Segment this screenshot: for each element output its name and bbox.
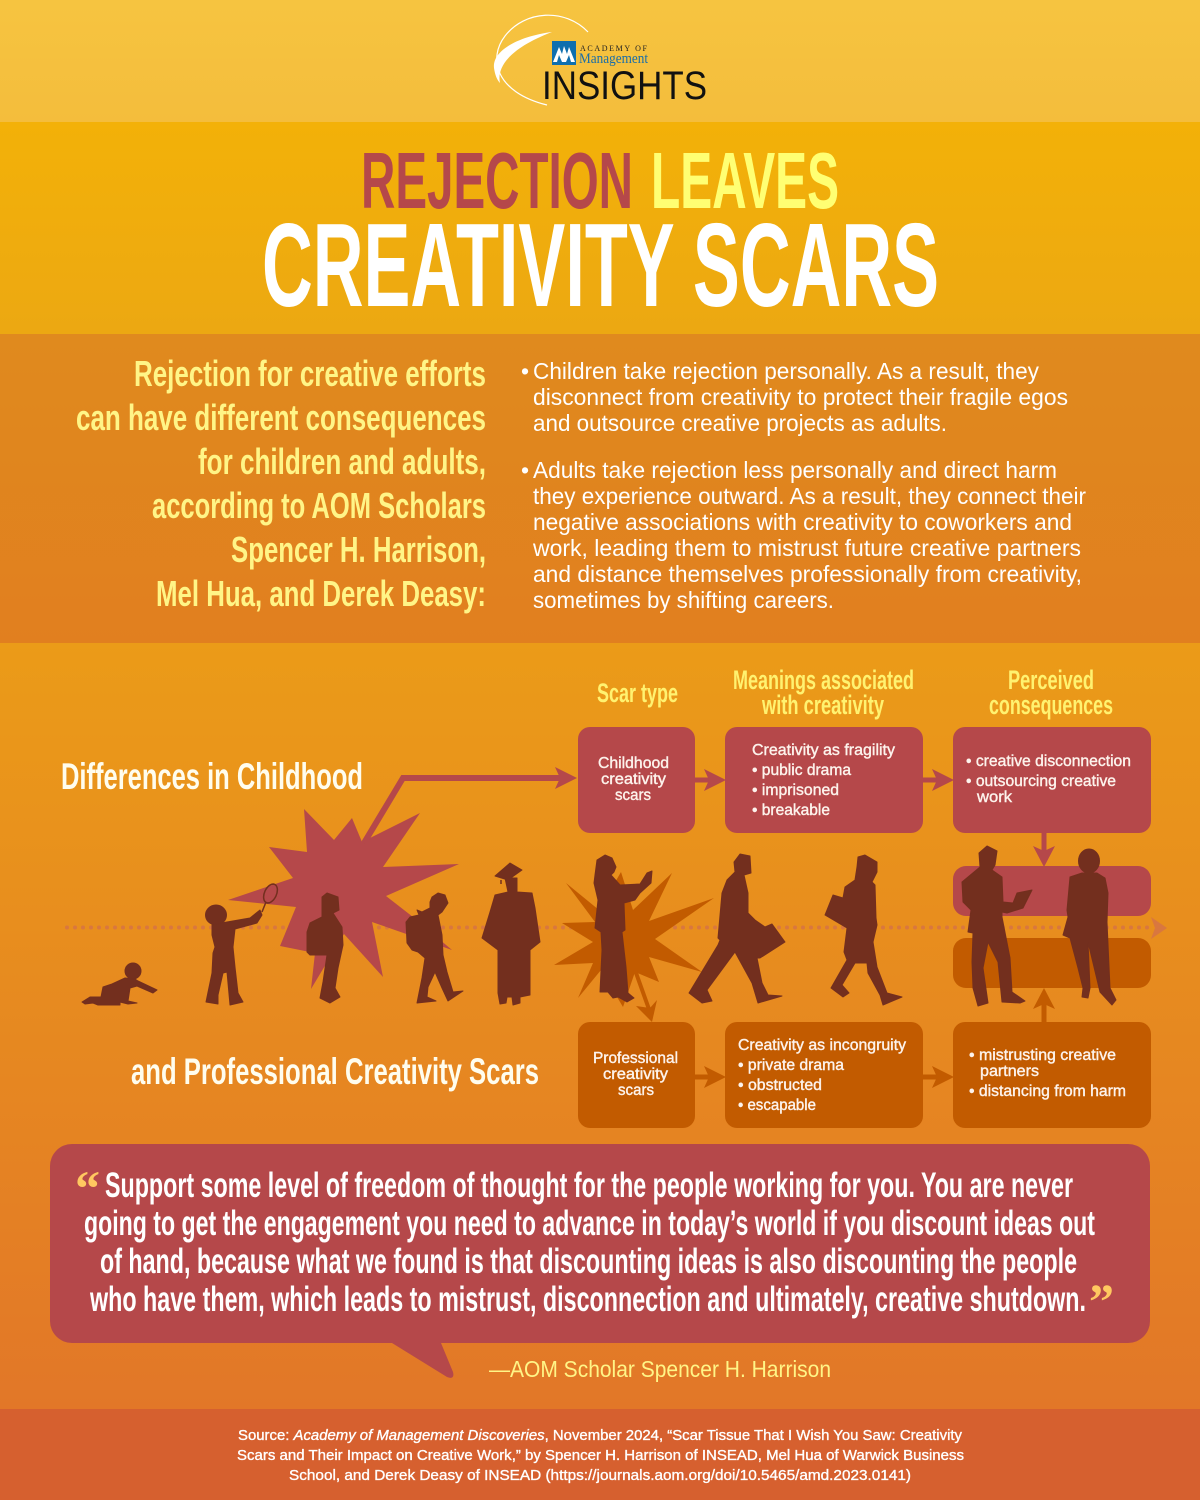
title xyxy=(262,136,939,332)
starburst: childhood xyxy=(228,809,459,989)
bullet: adults: Adults take rejection less personally and direct harm xyxy=(533,457,1057,483)
heading: perceived consequences: consequences xyxy=(989,690,1113,720)
band: childhood result xyxy=(953,866,1151,916)
icon: child with racquet xyxy=(206,882,280,1005)
panel: source footer xyxy=(0,1409,1200,1500)
icon: student with backpack xyxy=(307,893,343,1003)
logo: Academy of Management Insights: Management xyxy=(579,51,649,67)
panel: introduction xyxy=(0,334,1200,643)
heading: perceived consequences xyxy=(989,665,1113,720)
icon: student walking xyxy=(406,893,463,1003)
box: childhood consequences: • outsourcing creative xyxy=(966,773,1116,790)
box: professional creativity scars xyxy=(578,1022,695,1128)
lead text: according to AOM Scholars xyxy=(152,485,486,526)
bullet: children: disconnect from creativity to protect their fragile egos xyxy=(533,384,1068,410)
bullet: adults: • xyxy=(521,457,529,483)
bullet: children xyxy=(521,358,1068,436)
icon: opening quote mark: “ xyxy=(75,1160,100,1216)
bullet: adults: work, leading them to mistrust future creative partners xyxy=(532,535,1081,561)
icon: man with tablet xyxy=(962,846,1032,1006)
box: professional consequences: partners xyxy=(980,1063,1039,1080)
lead text: Rejection for creative efforts xyxy=(134,353,486,394)
box: creativity as fragility xyxy=(725,727,923,833)
lead text: for children and adults, xyxy=(198,441,486,482)
box: professional consequences xyxy=(953,1022,1151,1128)
logo: Academy of Management Insights: INSIGHTS xyxy=(542,64,707,108)
box: creativity as incongruity: • private drama xyxy=(738,1057,844,1074)
arrow: consequences up xyxy=(1033,988,1055,1022)
arrow: scars to meanings (professional) xyxy=(695,1066,726,1088)
lead text xyxy=(76,353,486,614)
box: professional consequences: • distancing from harm xyxy=(969,1083,1126,1100)
arrow: meanings to consequences (childhood) xyxy=(923,769,954,791)
source text xyxy=(237,1428,964,1484)
box: childhood consequences: work xyxy=(976,789,1013,806)
band: professional result xyxy=(953,938,1151,988)
box: childhood creativity scars: creativity xyxy=(601,771,666,788)
icon: woman with laptop xyxy=(594,855,652,1002)
arrow: burst to childhood scars xyxy=(364,767,577,843)
box: childhood consequences: • creative disconnection xyxy=(966,753,1131,770)
arrow: burst to professional scars xyxy=(635,970,657,1022)
box: creativity as fragility: • imprisoned xyxy=(752,782,839,799)
box: creativity as fragility: Creativity as fragility xyxy=(752,742,895,759)
box: creativity as incongruity: • obstructed xyxy=(738,1077,822,1094)
bullet: adults: they experience outward. As a result, they connect their xyxy=(533,483,1086,509)
panel: quote bubble xyxy=(50,1144,1150,1378)
icon: crawling baby xyxy=(82,963,157,1005)
icon: graduate xyxy=(482,863,540,1005)
icon: standing person xyxy=(1063,849,1116,1005)
logo: Academy of Management Insights: ACADEMY OF xyxy=(580,44,648,53)
heading: scar type: Scar type xyxy=(597,678,678,708)
lead text: can have different consequences xyxy=(76,397,486,438)
panel: logo band xyxy=(0,0,1200,122)
lead text: Spencer H. Harrison, xyxy=(231,529,486,570)
attribution: —AOM Scholar Spencer H. Harrison xyxy=(489,1356,831,1382)
box: creativity as incongruity xyxy=(725,1022,923,1128)
timeline dotted arrow xyxy=(67,917,1167,939)
bullet: children: • xyxy=(521,358,529,384)
heading: professional creativity scars: and Professional Creativity Scars xyxy=(131,1051,539,1092)
box: professional creativity scars: Professional xyxy=(593,1050,678,1067)
icon: man walking with briefcase xyxy=(689,854,785,1003)
box: creativity as fragility: • public drama xyxy=(752,762,851,779)
lead text: Mel Hua, and Derek Deasy: xyxy=(156,573,486,614)
panel: title band xyxy=(0,122,1200,334)
box: professional creativity scars: scars xyxy=(618,1082,654,1099)
bullet: adults xyxy=(521,457,1086,613)
icon: closing quote mark: ” xyxy=(1089,1273,1114,1329)
title: LEAVES xyxy=(651,136,839,225)
panel: diagram background xyxy=(0,643,1200,1409)
heading: meanings associated with creativity: with creativity xyxy=(761,690,884,720)
source text: School, and Derek Deasy of INSEAD (https://journals.aom.org/doi/10.5465/amd.2023.0141) xyxy=(289,1468,911,1484)
box: childhood creativity scars xyxy=(578,727,695,833)
quote text xyxy=(84,1166,1095,1319)
heading: meanings associated with creativity xyxy=(733,665,914,720)
box: childhood creativity scars: scars xyxy=(615,787,651,804)
arrow: consequences down xyxy=(1033,833,1055,867)
bullet: children: Children take rejection personally. As a result, they xyxy=(533,358,1039,384)
source text: Source: Academy of Management Discoveries , November 2024, “Scar Tissue That I Wish You Saw: Creativity xyxy=(238,1428,963,1444)
bullet: children: and outsource creative projects as adults. xyxy=(533,410,947,436)
starburst: professional xyxy=(554,872,714,1007)
box: childhood consequences xyxy=(953,727,1151,833)
box: creativity as incongruity: • escapable xyxy=(738,1097,816,1114)
arrow: scars to meanings (childhood) xyxy=(695,769,726,791)
heading: meanings associated with creativity: Meanings associated xyxy=(733,665,914,695)
heading: differences in childhood: Differences in Childhood xyxy=(61,756,363,797)
box: professional consequences: • mistrusting creative xyxy=(969,1047,1116,1064)
bullet: adults: negative associations with creativity to coworkers and xyxy=(533,509,1072,535)
box: creativity as incongruity: Creativity as incongruity xyxy=(738,1037,906,1054)
box: creativity as fragility: • breakable xyxy=(752,802,830,819)
arrow: meanings to consequences (professional) xyxy=(923,1066,954,1088)
logo: Academy of Management Insights xyxy=(494,15,707,108)
source text: Scars and Their Impact on Creative Work,” by Spencer H. Harrison of INSEAD, Mel Hua of Warwick Business xyxy=(237,1448,964,1464)
bullet: adults: sometimes by shifting careers. xyxy=(533,587,834,613)
box: childhood creativity scars: Childhood xyxy=(598,755,669,772)
title: REJECTION xyxy=(361,136,633,225)
heading: perceived consequences: Perceived xyxy=(1008,665,1094,695)
box: professional creativity scars: creativity xyxy=(603,1066,668,1083)
icon: woman walking xyxy=(825,855,902,1005)
bullet: adults: and distance themselves professionally from creativity, xyxy=(533,561,1082,587)
